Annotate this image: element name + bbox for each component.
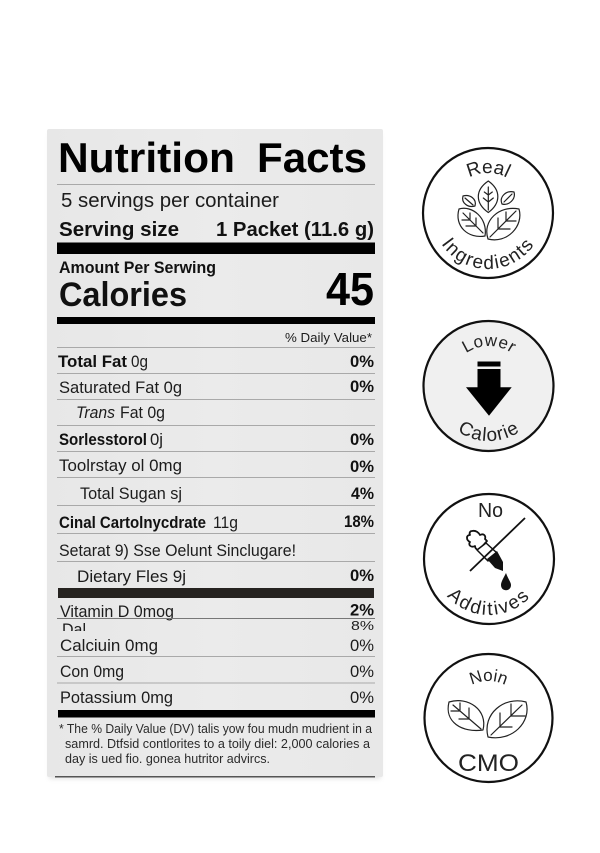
badge: real ingredients [422,146,554,280]
badge text: no: No [478,500,503,522]
badge: no additives [422,492,556,626]
badge text: noin: Noin [469,669,507,684]
row: cinal cartolnydrate: 11g [213,513,238,532]
icon: down arrow [466,362,512,416]
row: toolrstay [59,456,374,476]
title: Facts [257,134,367,181]
footnote: day is ued fio. gonea hutritor advircs. [65,751,270,766]
row: toolrstay: Toolrstay ol 0mg [59,456,182,475]
icon: two leaves [448,701,527,738]
row: con: 0% [350,663,374,681]
row: potassium: 0% [350,689,374,707]
row: trans fat: Trans [76,403,115,422]
row: vitamin d: 2% [350,602,374,620]
vitamins and minerals rows [57,602,375,707]
row: cinal cartolnydrate: 18% [344,513,374,531]
row: setarat: Setarat 9) Sse Oelunt Sinclugare! [59,541,296,560]
title: Nutrition [58,134,235,181]
row: calcium [60,636,374,655]
badge text: ingredients: Ingredients [442,237,532,270]
daily value header: % Daily Value* [285,330,372,345]
infographic canvas [47,129,556,784]
row: calcium: Calciuin 0mg [60,636,158,655]
row: con: Con 0mg [60,662,124,681]
row: total fat: 0g [131,352,148,371]
icon: leaves [458,181,520,240]
badge text: calorie: Calorie [460,422,518,442]
badge text: real: Real [466,162,512,178]
row: potassium [60,688,374,707]
calories block: Amount Per Serwing [59,258,216,277]
row: vitamin d: Vitamin D 0mog [60,602,174,621]
row: total fat: 0% [350,353,374,371]
serving size [59,219,374,241]
row: con [60,662,374,681]
row: dal clipped: 8% [351,618,375,633]
footnote: samrd. Dtfsid contlorites to a toily diel: 2,000 calories a [65,736,371,751]
row: dal clipped: Dal [62,620,86,639]
row: cinal cartolnydrate [59,513,374,532]
row: sorlesstorol: 0j [150,430,163,449]
row: total sugan [80,484,374,503]
row: potassium: Potassium 0mg [60,688,173,707]
row: cinal cartolnydrate: Cinal Cartolnycdrate [59,513,206,532]
row: calcium: 0% [350,637,374,655]
row: vitamin d [60,602,374,621]
footnote: * The % Daily Value (DV) talis yow fou mudn mudrient in a [59,721,373,736]
badge text: additives: Additives [446,590,528,616]
row: toolrstay: 0% [350,458,374,476]
row: saturated fat: Saturated Fat 0g [59,378,182,397]
serving size: 1 Packet (11.6 g) [216,219,374,241]
servings per container: 5 servings per container [61,189,279,212]
badge: lower calorie [422,320,555,452]
calories block [59,258,374,315]
icon: dropper with slash [467,518,525,590]
badge: non gmo [423,652,554,784]
footnote [59,721,373,766]
title [58,134,367,181]
calories block: 45 [326,263,374,315]
row: dal clipped [63,621,374,631]
row: saturated fat: 0% [350,378,374,396]
row: sorlesstorol: 0% [350,431,374,449]
row: sorlesstorol: Sorlesstorol [59,430,147,449]
calories block: Calories [59,276,187,314]
row: dietary fles [77,567,374,586]
badge text: lower: Lower [462,336,516,352]
badge text: cmo: CMO [458,750,519,777]
row: total fat: Total Fat [58,352,127,371]
row: sorlesstorol [59,430,374,449]
row: total sugan: 4% [351,485,374,503]
row: dietary fles: 0% [350,567,374,585]
row: saturated fat [59,378,374,397]
row: dietary fles: Dietary Fles 9j [77,567,186,586]
row: trans fat [76,403,165,422]
row: total sugan: Total Sugan sj [80,484,182,503]
nutrient rows [57,352,375,586]
panel: nutrition facts label [47,129,383,779]
serving size: Serving size [59,219,179,241]
row: total fat [58,352,374,371]
row: trans fat: Fat 0g [120,403,165,422]
